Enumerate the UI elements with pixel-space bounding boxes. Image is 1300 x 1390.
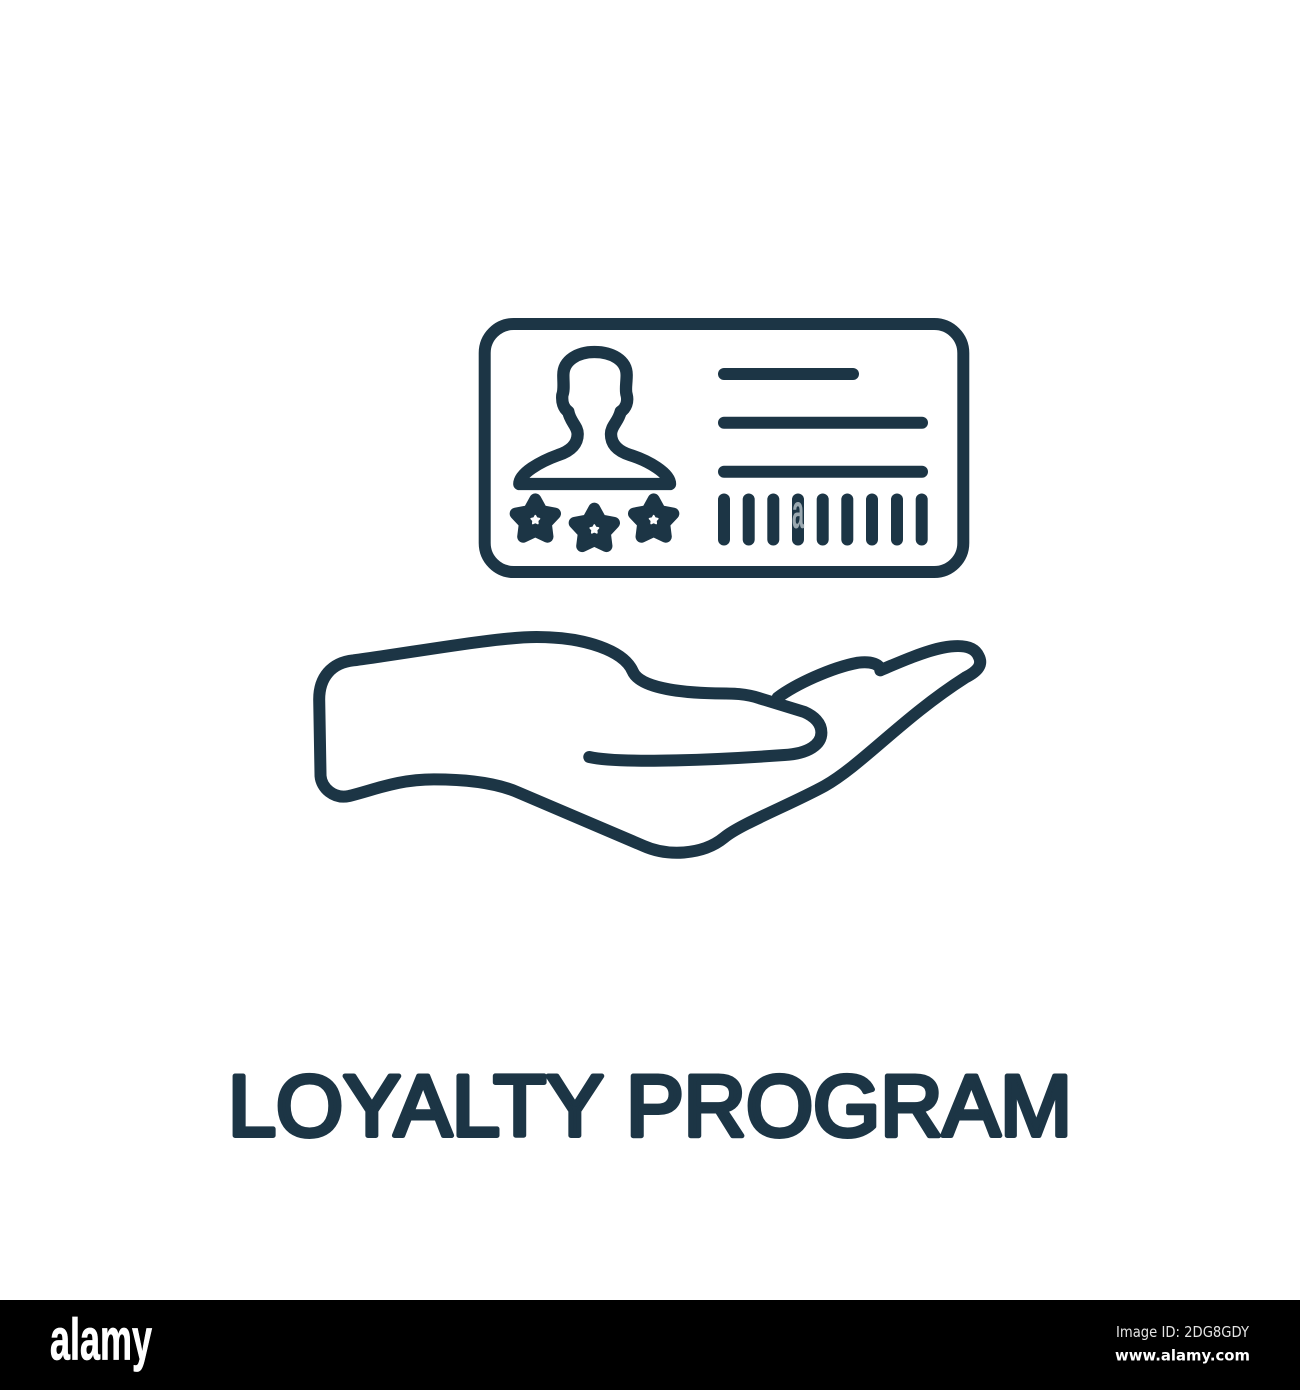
image id: Image ID: 2DG8GDY bbox=[1116, 1323, 1250, 1341]
icon: star three bbox=[634, 499, 673, 537]
card outline bbox=[485, 324, 963, 572]
footer bar bbox=[0, 1300, 1300, 1390]
card barcode bbox=[724, 500, 922, 540]
title: LOYALTY PROGRAM bbox=[228, 1058, 1072, 1154]
icon: star two bbox=[575, 509, 614, 546]
text: a bbox=[792, 486, 804, 539]
card text lines bbox=[724, 374, 922, 472]
footer logo: alamy bbox=[50, 1308, 152, 1372]
icon: loyalty membership card bbox=[485, 324, 963, 572]
icon: open hand bbox=[319, 637, 980, 853]
icon: star one bbox=[516, 499, 555, 537]
rating stars bbox=[516, 499, 673, 546]
website: www.alamy.com bbox=[1115, 1346, 1250, 1364]
icon: member portrait bbox=[519, 352, 670, 484]
